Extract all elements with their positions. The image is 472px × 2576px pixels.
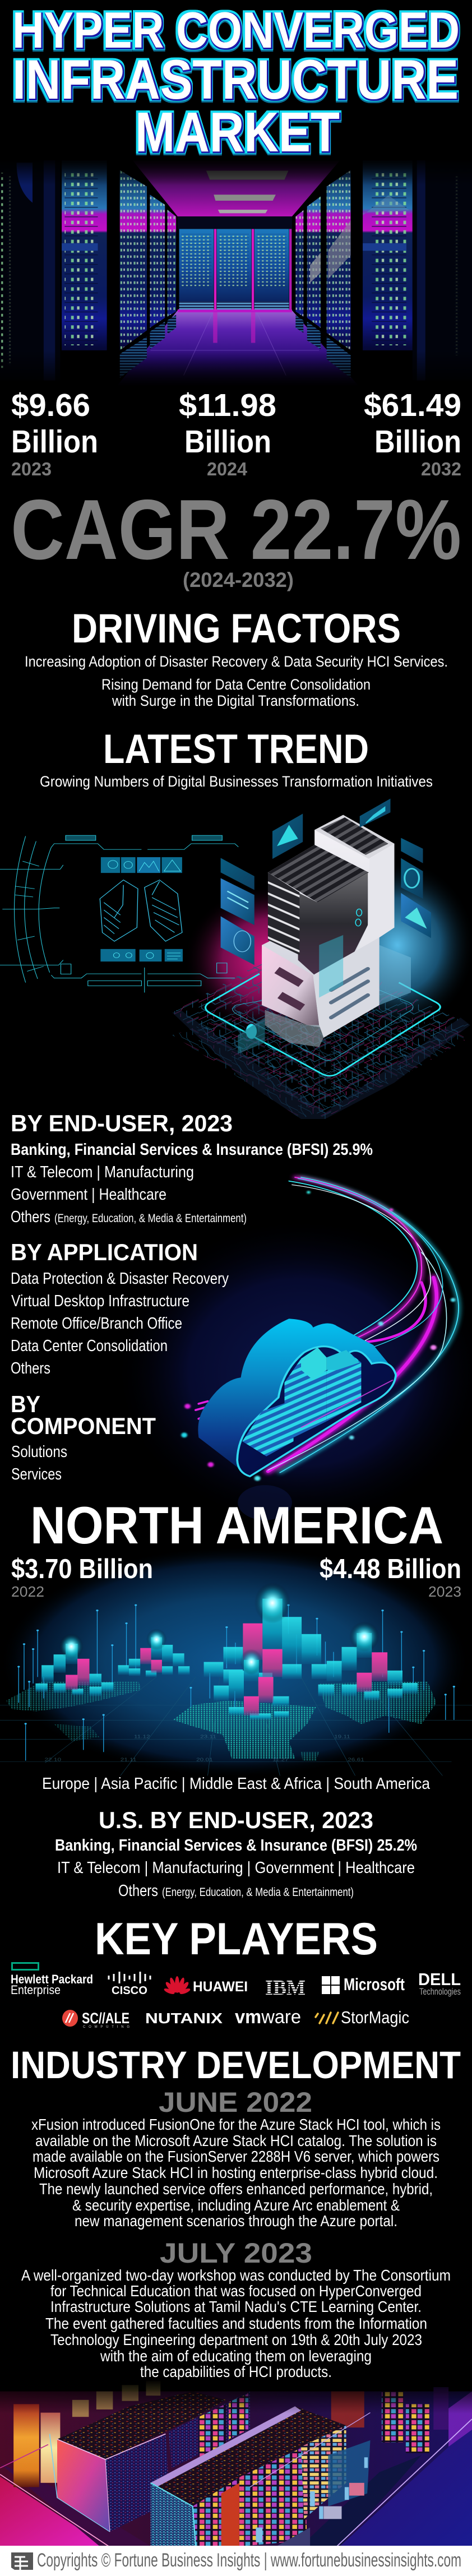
server cube 1 (50, 2392, 226, 2532)
CAGR: (2024-2032) (183, 568, 294, 591)
small figures (256, 2440, 371, 2546)
faint grid labels: 20.01 (196, 1758, 213, 1763)
stat: 2024 (179, 387, 276, 479)
cyan data bars (35, 1599, 418, 1720)
June 2022 development: new management scenarios through the Azure portal. (75, 2212, 397, 2230)
by end-user 2023: IT & Telecom | Manufacturing (11, 1163, 194, 1181)
fiber light trails (196, 1177, 459, 1473)
market size stats (11, 387, 461, 479)
logo: Huawei (163, 1976, 248, 1995)
by component (11, 1391, 156, 1483)
faint grid labels: 11.12 (134, 1735, 150, 1740)
grid lines (0, 1677, 472, 1775)
by application: BY APPLICATION (11, 1239, 198, 1265)
value: 2023 (320, 1554, 461, 1600)
faint grid labels (44, 1735, 364, 1763)
stat: 2032: Billion (374, 424, 461, 460)
June 2022 development: JUNE 2022 (159, 2087, 312, 2118)
by application: Data Protection & Disaster Recovery (11, 1270, 229, 1288)
by application: Data Center Consolidation (11, 1337, 168, 1355)
logo: Huawei: HUAWEI (193, 1979, 248, 1995)
by component: Solutions (11, 1443, 67, 1461)
July 2023 development (21, 2237, 451, 2380)
by end-user 2023: (Energy, Education, & Media & Entertainment) (54, 1212, 247, 1225)
U.S. by end-user (55, 1807, 417, 1900)
stat: 2023: $9.66 (11, 387, 90, 423)
faint grid labels: 19.11 (334, 1735, 350, 1740)
North America values (11, 1554, 461, 1600)
footer band (0, 2546, 472, 2576)
stat: 2024: Billion (184, 424, 271, 460)
server tower (238, 815, 411, 1054)
title: MARKET (135, 101, 340, 164)
July 2023 development: the capabilities of HCI products. (140, 2363, 332, 2380)
by application: Others (11, 1359, 50, 1377)
driving factors (25, 606, 448, 709)
logo: Cisco (109, 1972, 150, 1997)
June 2022 development (31, 2087, 441, 2230)
key players logos (11, 1963, 461, 2029)
stat: 2023 (11, 387, 98, 479)
logo: Dell Technologies: DELL (418, 1969, 461, 1989)
value: 2023: 2023 (428, 1583, 461, 1600)
logo: Nutanix: NUTANIX (145, 2010, 223, 2027)
pink data bars (66, 1624, 387, 1715)
July 2023 development: Technology Engineering department on 19th & 20th July 2023 (50, 2331, 422, 2348)
July 2023 development: with the aim of educating them on leveraging (100, 2347, 372, 2365)
logo: Scale Computing (62, 2010, 129, 2029)
by component: COMPONENT (11, 1413, 156, 1439)
North America heading: NORTH AMERICA (30, 1496, 443, 1555)
glowing beacons (59, 1583, 380, 1675)
U.S. by end-user: (Energy, Education, & Media & Entertainment) (162, 1886, 354, 1899)
by application (11, 1239, 229, 1377)
driving factors: DRIVING FACTORS (72, 606, 401, 651)
logo: Microsoft (322, 1974, 405, 1994)
value: 2022: $3.70 Billion (11, 1554, 153, 1584)
faint grid labels: 22.10 (44, 1758, 61, 1763)
stat: 2032 (364, 387, 461, 479)
by component: BY (11, 1391, 40, 1417)
logo: HPE: Hewlett Packard (11, 1972, 93, 1986)
value: 2022 (11, 1554, 153, 1600)
illustration: server room corridor (0, 158, 472, 387)
July 2023 development: JULY 2023 (160, 2237, 312, 2269)
illustration: cloud city with fiber light trails (114, 1177, 472, 1528)
title (12, 2, 460, 164)
U.S. by end-user: Banking, Financial Services & Insurance (BFSI) 25.2% (55, 1837, 417, 1854)
by end-user 2023: Others (11, 1208, 50, 1226)
logo: HPE: Enterprise (11, 1983, 61, 1997)
stat: 2024: $11.98 (179, 387, 276, 423)
HUD wireframe (0, 835, 238, 993)
pins (17, 1604, 455, 1761)
illustration: isometric HCI server with holographic panels (0, 799, 472, 1119)
logo: Scale Computing: SC//ALE (82, 2010, 129, 2027)
logo: VMware: vmware (235, 2006, 301, 2028)
stat: 2032: 2032 (421, 459, 461, 479)
driving factors: with Surge in the Digital Transformations. (112, 692, 359, 709)
faint grid labels: 21.11 (121, 1758, 137, 1763)
HUD mini panels (100, 857, 183, 961)
logo: IBM: IBM (265, 1976, 306, 2000)
wireframe servers (100, 880, 182, 941)
by component: Services (11, 1465, 62, 1483)
back racks (13, 2381, 472, 2487)
stat: 2024: 2024 (207, 459, 248, 479)
by end-user 2023: Government | Healthcare (11, 1186, 166, 1204)
cloud buildings (242, 1348, 361, 1456)
key players heading: KEY PLAYERS (95, 1914, 378, 1964)
by end-user 2023 (11, 1110, 373, 1226)
cloud body (198, 1319, 396, 1520)
driving factors: Rising Demand for Data Centre Consolidation (101, 676, 371, 693)
logo: Microsoft: Microsoft (344, 1974, 405, 1994)
server cube 2 (150, 2406, 371, 2546)
logo: StorMagic (316, 2008, 409, 2027)
stat: 2023: Billion (11, 424, 98, 460)
logo: Scale Computing: COMPUTING (83, 2025, 129, 2029)
U.S. by end-user: IT & Telecom | Manufacturing | Government | Healthcare (57, 1859, 415, 1877)
logo: Dell Technologies (418, 1969, 461, 1997)
by end-user 2023: Banking, Financial Services & Insurance (BFSI) 25.9% (11, 1141, 373, 1159)
faint grid labels: 23.11 (200, 1735, 216, 1740)
latest trend (40, 727, 433, 790)
latest trend: Growing Numbers of Digital Businesses Transformation Initiatives (40, 773, 433, 790)
illustration: neon data center from above (0, 2380, 472, 2546)
latest trend: LATEST TREND (103, 727, 369, 772)
other regions: Europe | Asia Pacific | Middle East & Africa | South America (42, 1775, 431, 1793)
by application: Remote Office/Branch Office (11, 1315, 182, 1333)
July 2023 development: for Technical Education that was focused on HyperConverged (50, 2282, 422, 2300)
sparkles (181, 1191, 455, 1481)
cyan platform outline (206, 974, 440, 1076)
stat: 2023: 2023 (11, 459, 52, 479)
by end-user 2023: BY END-USER, 2023 (11, 1110, 233, 1136)
July 2023 development: Infrastructure Solutions at Tamil Nadu's CTE Learning Center. (50, 2298, 422, 2315)
circuit board base (172, 940, 470, 1119)
logo: Cisco: CISCO (112, 1985, 147, 1997)
faint grid labels: 26.61 (348, 1758, 364, 1763)
dotted map (6, 1681, 437, 1761)
July 2023 development: The event gathered faculties and students from the Information (45, 2315, 427, 2332)
stat: 2032: $61.49 (364, 387, 461, 423)
logo: HPE (11, 1963, 93, 1997)
logo: StorMagic: StorMagic (341, 2008, 409, 2027)
June 2022 development: & security expertise, including Azure Arc enablement & (72, 2196, 400, 2214)
U.S. by end-user: U.S. BY END-USER, 2023 (99, 1807, 373, 1833)
top fade (0, 2380, 472, 2413)
holographic data panels (221, 799, 431, 965)
illustration: digital world map with bars (0, 1546, 472, 1778)
by application: Virtual Desktop Infrastructure (11, 1292, 189, 1310)
neon floor lines (0, 2419, 472, 2546)
footer logo (11, 2552, 33, 2570)
value: 2022: 2022 (11, 1583, 44, 1600)
U.S. by end-user: Others (118, 1882, 158, 1900)
faint grid labels: 11.27 (272, 1758, 289, 1763)
